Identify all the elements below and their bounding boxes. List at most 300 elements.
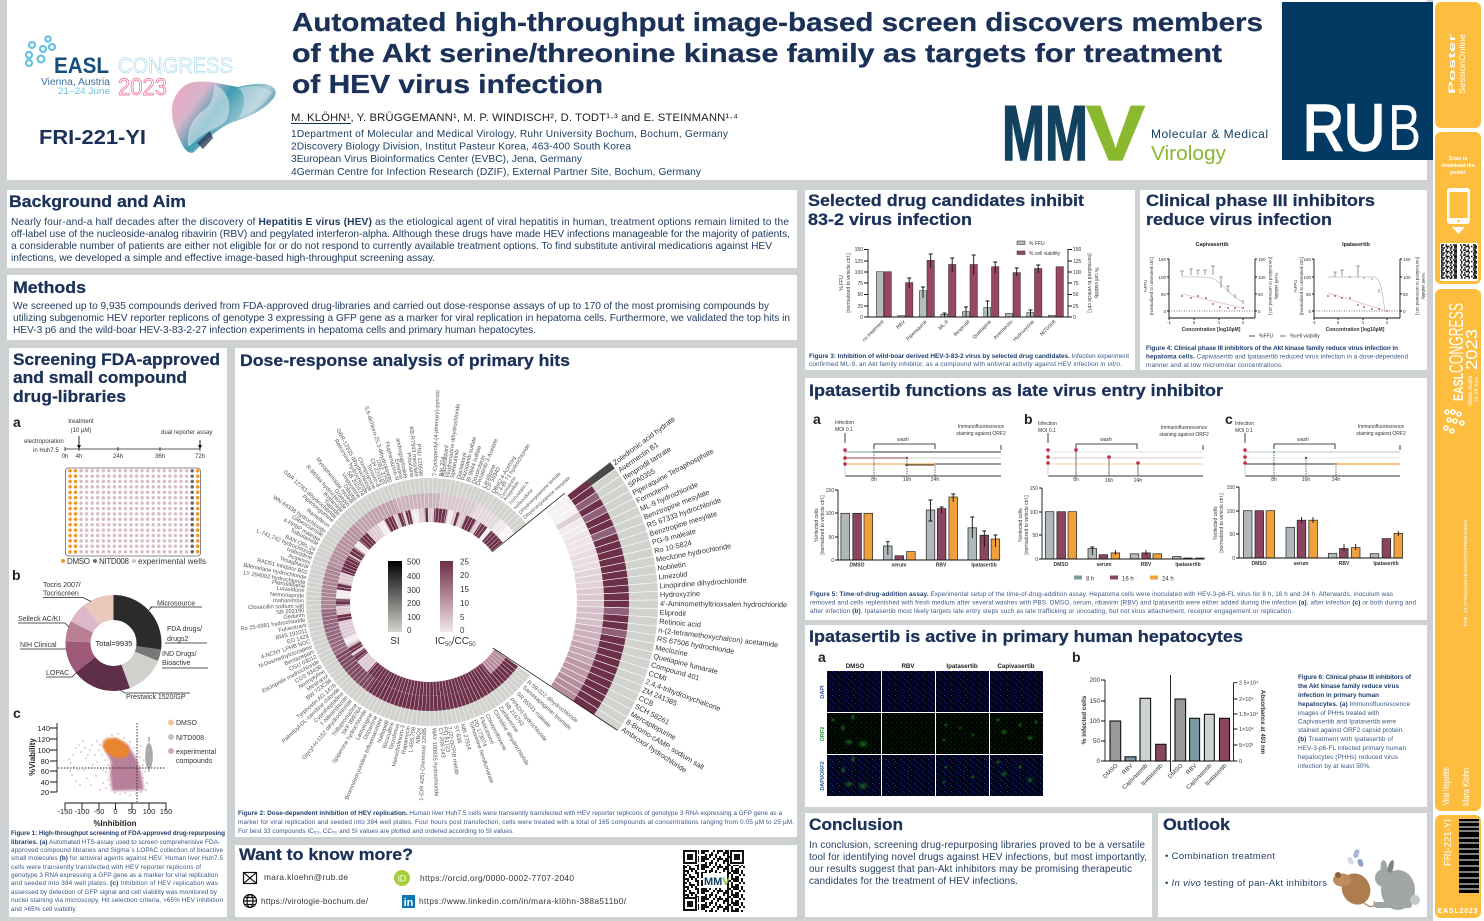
icon: linkedin <box>402 895 415 909</box>
compound labels right: Ambroxol hydrochloride <box>620 725 688 775</box>
compound labels right: 2,4,4-trihydroxychalcone <box>644 677 722 713</box>
compound labels left: Piperlongumine <box>301 494 335 524</box>
compound labels left: Dopamine <box>363 715 379 741</box>
compound labels right: CCB <box>637 694 655 708</box>
bar chart: 125 <box>1073 259 1082 265</box>
compound labels top and bottom right: Daclatasvir <box>456 451 469 480</box>
panel letters: a <box>813 411 821 427</box>
compound labels left: mahanimbin <box>273 598 304 604</box>
bar chart c: 150 <box>1227 485 1235 491</box>
compound labels left: Nortriptyline <box>298 669 327 691</box>
QR code <box>683 850 745 912</box>
compound labels left: Glibenclamide <box>290 514 324 539</box>
compound labels top and bottom right: PD 173074 <box>471 719 487 748</box>
scatter plot: 100 <box>143 807 155 816</box>
chart: Capivasertib: %FFU <box>1143 280 1148 292</box>
logo: EASL Congress 2023 <box>26 36 233 101</box>
figure 2 caption: For best 33 compounds IC₅₀, CC₅₀ and SI values are plotted and ordered according to SI values. <box>238 828 514 835</box>
compound labels left: Prilocaine <box>405 452 414 478</box>
timeline: dual reporter assay <box>161 430 212 436</box>
affiliations: 3European Virus Bioinformatics Center (EVBC), Jena, Germany <box>291 154 583 165</box>
heading: 83-2 virus infection <box>808 211 972 229</box>
schematic b: 24h <box>1134 478 1142 484</box>
heading: Ipatasertib is active in primary human hepatocytes <box>809 628 1243 646</box>
compound labels top and bottom right: Sarsasapogenin bromide <box>521 685 572 732</box>
compound labels top and bottom right: Tomoxetine hemifumarate <box>467 720 494 784</box>
figure 6 caption: images of PHHs treated with <box>1298 710 1379 717</box>
bar chart b: Ipatasertib <box>1204 763 1229 787</box>
logo: MMV <box>1002 89 1268 177</box>
schematic b <box>1038 421 1209 484</box>
text block: Nearly four-and-a half decades after the discovery of Hepatitis E virus (HEV) as the etiological agent of viral hepatitis in human, treatment options remain limited to the <box>11 217 789 228</box>
bar chart a: %infected cells <box>814 508 820 542</box>
panel letters <box>813 411 1233 427</box>
heading: Want to know more? <box>239 846 413 864</box>
right sector rings (top 33) <box>546 462 658 732</box>
bar chart b: 0 <box>1239 759 1242 765</box>
figure 1 caption: and >65% cell viability. <box>11 906 77 913</box>
figure 6 caption: HEV-3-p6-FL infected primary human <box>1298 745 1406 752</box>
compound labels left: Vinpocetine <box>340 472 361 500</box>
compound labels top and bottom right: ST-638 <box>452 725 462 744</box>
bar chart: % cell viability <box>1093 267 1099 299</box>
bar chart a: 150 <box>826 488 834 494</box>
compound labels top and bottom right: Anagrelide <box>502 480 521 502</box>
compound labels left: NBQX <box>416 727 423 744</box>
scatter plot: DMSO <box>176 720 198 727</box>
schematic c: MOI 0.1 <box>1235 428 1253 434</box>
bar chart b: 100 <box>1089 718 1100 725</box>
timeline: treatment <box>68 419 94 425</box>
icon: orcid <box>394 870 410 886</box>
bar chart b: 100 <box>1030 510 1038 516</box>
legend: IC50/CC50 colour bar: 50 <box>445 642 452 648</box>
chart: Ipatasertib: %FFU <box>1293 280 1298 292</box>
scatter plot: 100 <box>37 746 50 755</box>
chart: Capivasertib: Concentration [log10µM] <box>1182 327 1241 333</box>
logo: MMV: MM <box>1002 89 1088 177</box>
bar chart: Hydroxyzine <box>1012 319 1036 343</box>
title <box>292 7 1263 99</box>
compound labels left: Triflupromazine <box>331 703 359 738</box>
chart: Ipatasertib: 150 <box>1303 257 1311 262</box>
compound labels right: Ro 10-5824 <box>653 538 692 555</box>
time legend <box>1074 576 1174 582</box>
figure 1 caption: cells were transiently transfected with HEV reporter replicons of <box>11 864 201 871</box>
chart: Ipatasertib: -1 <box>1312 320 1316 325</box>
chart legend: %FFU <box>1259 334 1274 340</box>
bar chart: Piperaquine <box>905 319 929 342</box>
schematic c: Infection <box>1235 421 1254 427</box>
figure 3 caption: Figure 3: Inhibition of wild-boar derived HEV-3-83-2 virus by selected drug candidates. Infection experiment <box>809 353 1129 360</box>
schematic a: Infection <box>835 420 854 426</box>
microscopy image grid: DMSO <box>846 663 864 670</box>
chart: Capivasertib: %cell viability <box>1274 273 1279 300</box>
website: https://virologie-bochum.de/ <box>261 896 369 906</box>
title: of the Akt serine/threonine kinase family as targets for treatment <box>292 38 1222 68</box>
timeline: 4h <box>76 454 82 460</box>
scatter plot: %Inhibition <box>93 819 137 828</box>
compound labels right: Zoledronic acid hydrate <box>611 414 677 467</box>
compound labels right: Nobiletin <box>657 560 686 573</box>
legend: SI colour bar: 500 <box>407 558 421 566</box>
letter b: b <box>1072 649 1081 665</box>
donut chart: drugs2 <box>167 636 189 643</box>
microscopy image grid: Capivasertib <box>997 663 1035 670</box>
compound labels left: Lamotrigine <box>355 712 374 741</box>
compound labels right: SCH 58261 <box>633 702 671 727</box>
legend: SI colour bar: 100 <box>407 613 421 622</box>
compound labels top and bottom right: Chlorprothixene <box>484 713 507 752</box>
compound labels left: Nemonapride <box>270 592 304 600</box>
bar chart b: 1×10⁴ <box>1239 726 1254 733</box>
compound labels right: Mercaptopurine <box>629 709 678 742</box>
compound labels top and bottom right: Lacidipine <box>481 464 498 489</box>
compound labels left: R-96544 hydrochloride <box>304 464 347 511</box>
text block: In conclusion, screening drug-repurposing libraries proved to be a versatile <box>809 840 1146 851</box>
bar chart <box>839 241 1099 343</box>
bar chart b: DMSO <box>1102 763 1120 780</box>
schematic c <box>1235 421 1406 483</box>
figure 2 caption: Figure 2: Dose-dependent inhibition of HEV replication. Human liver Huh7.5 cells were transiently transfected with HEV reporter replicons of genotype 3 RNA expressing a GFP gene as a <box>238 810 782 817</box>
heading: Conclusion <box>809 816 903 834</box>
chart: Capivasertib: 1 <box>1218 320 1221 325</box>
scatter plot: -150 <box>57 807 73 816</box>
donut chart: IND Drugs/ <box>162 651 197 658</box>
compound labels right: ZM 241385 <box>641 685 679 708</box>
compound labels left: Glycyl-H-1152 dihydrochloride <box>301 699 354 761</box>
chart: Ipatasertib: %cell viability <box>1421 273 1426 300</box>
chart: Ipatasertib: 100 <box>1303 275 1311 280</box>
compound labels left: Rapamycin <box>401 726 412 755</box>
compound labels top and bottom right: Trichostatin A <box>508 480 531 507</box>
bar chart b: %infected cells <box>1018 508 1024 542</box>
schematic a: 16h <box>903 477 911 483</box>
compound labels right: RS 67506 hydrochloride <box>656 634 735 656</box>
panel: want to know more <box>235 845 797 917</box>
figure 5 caption: removed and cells replenished with fresh medium after several washes with PBS. DMSO, serum, ribavirin (RBV) and Ipatasertib were either added during the infection (a), after infection (c) or both during and <box>810 600 1416 606</box>
compound labels right: 4'-Aminomethyltrioxsalen hydrochloride <box>660 599 787 609</box>
bar chart: % cell viability <box>1029 251 1061 257</box>
logo: EASL Congress 2023: CONGRESS <box>118 53 233 78</box>
compound labels left: Tolbutamide <box>289 528 319 547</box>
bar chart b: 5×10³ <box>1239 743 1253 749</box>
scatter plot: NITD008 <box>176 735 204 742</box>
title: of HEV virus infection <box>292 69 603 99</box>
illustration: pills <box>1346 849 1364 867</box>
legend: SI colour bar: 300 <box>407 586 421 595</box>
affiliations: 4German Centre for Infection Research (DZIF), External Partner Site, Bochum, Germany <box>291 167 702 178</box>
schematic a: 24h <box>931 477 939 483</box>
compound labels right: Benztropine mesylate <box>648 509 718 538</box>
bar chart b: Ipatasertib <box>1140 763 1165 787</box>
illustration: mouse <box>1333 869 1375 909</box>
compound labels left: BMS 191011 <box>275 628 308 642</box>
timeline: 36h <box>155 454 165 460</box>
chart: Capivasertib: 0 <box>1163 309 1166 314</box>
figure 1 caption: genotype 3 RNA expressing a GFP gene as a marker for viral replication <box>11 872 218 879</box>
compound labels right <box>611 414 787 775</box>
compound labels left: SB 202190 <box>276 608 305 616</box>
logo: MMV: V <box>1086 89 1145 177</box>
figure 1 caption <box>11 830 225 913</box>
bar chart b: [normalized to vehicle ctrl.] <box>1024 495 1030 555</box>
compound labels left: OSU 03012 <box>289 654 318 673</box>
chart: Capivasertib <box>1143 242 1279 333</box>
logo: EASL Congress 2023: 21–24 June <box>58 86 110 97</box>
donut chart: Microsource <box>157 600 195 608</box>
legend: SI colour bar: 400 <box>407 572 421 581</box>
384 well plate <box>66 468 200 556</box>
donut chart: Bioactive <box>162 660 191 667</box>
chart: Capivasertib: 150 <box>1258 257 1266 262</box>
timeline: electroporation <box>24 439 64 445</box>
schematic a <box>835 420 1006 483</box>
bar chart c: 100 <box>1227 509 1235 515</box>
bar chart c: 0 <box>1232 556 1235 562</box>
panel label a: a <box>13 414 21 430</box>
bar chart b: RBV <box>1141 562 1152 568</box>
time legend: 8 h <box>1086 576 1094 582</box>
chart: Capivasertib: [normalized to untreated ctrl.] <box>1268 257 1273 315</box>
compound labels left: Tesaglitazar <box>279 556 310 571</box>
heading: Outlook <box>1163 816 1231 834</box>
timeline: 0h <box>62 454 68 460</box>
figure 4 caption: hepatoma cells. Capivasertib and Ipatasertib reduced virus infection in a dose-dependend <box>1146 354 1408 360</box>
legend: IC50/CC50 colour bar: /CC <box>452 636 469 647</box>
figure 1 caption: small molecules (b) for antiviral agents against HEV. Human liver Huh7.5 <box>11 855 223 862</box>
compound labels top and bottom right: SR 95531 maleate <box>515 691 552 729</box>
bar chart b: DMSO <box>1054 562 1069 568</box>
logo: EASL Congress 2023: EASL <box>54 53 109 78</box>
donut chart: Prestwick 1520/GP <box>126 694 186 701</box>
bar chart: 0 <box>860 315 863 321</box>
figure 1 caption: assessed by detection of GFP signal and cell viability was monitored by <box>11 889 218 896</box>
compound labels top and bottom right: BI 8844 sulfate <box>466 445 483 483</box>
compound labels left: Fluphenazine-N <box>383 441 399 481</box>
compound labels left: BW 723C86 <box>305 678 333 702</box>
schematic a: wash <box>897 437 909 443</box>
circular heatmap <box>240 390 787 800</box>
figure 1 caption: and seeded into 384 well plates. (c) Inhibition of HEV replication was <box>11 880 218 887</box>
compound labels right: Ifenprodil tartrate <box>621 445 673 482</box>
bar chart: 25 <box>857 304 863 310</box>
sidebar: congress: 21–24 June <box>1474 377 1480 402</box>
compound labels left: Pterostilbene <box>272 580 305 590</box>
compound labels right: ML-9 hydrochloride <box>639 480 699 513</box>
text block: a considerable number of patients are either not eligible for or do not respond to currently available treatment options. To find substitute antiviral medications against HEV <box>11 241 772 252</box>
sector cut lines <box>492 493 617 730</box>
bar chart b: 150 <box>1089 698 1100 705</box>
title: Automated high-throughput image-based screen discovers members <box>292 7 1263 37</box>
compound labels left: Cyproheptadine <box>313 691 345 724</box>
panel: background and aim <box>7 190 797 268</box>
compound labels left: Clomipramine <box>356 456 377 491</box>
compound labels right: Avermectin B1 <box>616 440 660 474</box>
bar chart a <box>814 488 1000 568</box>
sidebar: barcode <box>1435 815 1481 918</box>
legend: IC50/CC50 colour bar: 5 <box>460 613 465 622</box>
icon: envelope <box>244 872 256 884</box>
compound labels left: Spiperone hydrochloride <box>332 709 369 765</box>
compound labels left: Ro 25-6981 hydrochloride <box>240 618 306 633</box>
compound labels top and bottom right: Spebrutinib <box>450 449 461 479</box>
chart: Ipatasertib: [normalized to untreated ctrl.] <box>1415 257 1420 315</box>
compound labels left: 5,6-dichloro-25,3-dihydrokinetin <box>363 406 393 483</box>
compound labels top and bottom right: Pazopanib sulfate <box>461 436 478 481</box>
bar chart: % FFU <box>1029 241 1045 247</box>
bar chart: 150 <box>1073 247 1082 253</box>
figure 1 caption: libraries. (a) Automated HTS-assay used to screen comprehensive FDA- <box>11 839 220 846</box>
compound labels left: DBZ 3755 <box>374 459 389 485</box>
bar chart c: DMSO <box>1252 561 1267 567</box>
bar chart c: Ipatasertib <box>1373 561 1399 567</box>
chart: Capivasertib: 50 <box>1161 292 1166 297</box>
schematic b: 16h <box>1105 478 1113 484</box>
schematic a: staining against ORF2 <box>956 431 1006 437</box>
bar chart: 50 <box>1073 292 1079 298</box>
compound labels top and bottom right <box>430 390 579 797</box>
bar chart: no treatment <box>861 319 886 343</box>
legend: IC50/CC50 colour bar: 10 <box>460 599 469 608</box>
bar chart b: 50 <box>1032 533 1038 539</box>
text block: infections, we developed a simple and effective image-based high-throughput screening assay. <box>11 253 435 264</box>
bar chart b: RBV <box>1121 763 1134 776</box>
compound labels left: Tacrolimus <box>388 723 401 751</box>
bar chart: 75 <box>857 281 863 287</box>
compound labels top and bottom right: CP 55940 <box>485 466 502 492</box>
bar chart: 100 <box>855 270 863 276</box>
compound labels left: EO 1428 <box>286 634 310 646</box>
logo: MMV: Virology <box>1151 143 1226 165</box>
affiliations: 2Discovery Biology Division, Institut Pasteur Korea, 463-400 South Korea <box>291 142 631 152</box>
figure 3 caption <box>809 353 1129 368</box>
sidebar: barcode: FRI-221-YI <box>1443 819 1454 866</box>
bar chart: 50 <box>857 292 863 298</box>
compound labels left: Mestranol <box>306 674 330 693</box>
donut chart: Selleck AC/KI <box>18 616 60 623</box>
compound labels top and bottom right: R 59-022 dihydrochloride <box>525 680 579 724</box>
bar chart: [normalized to vehicle ctrl.] <box>846 253 852 313</box>
compound labels top and bottom right: Dasatinib-3-Acetate <box>475 438 500 487</box>
figure 5 caption <box>810 591 1416 615</box>
legend: IC50/CC50 colour bar: 20 <box>460 571 469 580</box>
figure 4 caption: manner and at low micromolar concentrations. <box>1146 362 1283 369</box>
affiliations <box>291 129 729 178</box>
panel letters: b <box>1024 411 1033 427</box>
schematic b: 8h <box>1073 477 1079 483</box>
schematic c: Immunofluorescence <box>1358 424 1404 430</box>
plate legend <box>61 557 206 566</box>
chart: Capivasertib: 2 <box>1242 320 1245 325</box>
compound labels right: Compound 401 <box>650 660 701 683</box>
bar chart a: serum <box>891 562 907 568</box>
heading <box>1146 192 1375 229</box>
bar chart b: 2×10⁴ <box>1239 696 1254 703</box>
logo: MMV: Molecular & Medical <box>1151 127 1268 141</box>
compound labels left: Palmitoyl-DL-carnitine chloride <box>281 687 341 745</box>
chart: Ipatasertib: 50 <box>1306 292 1311 297</box>
microscopy image grid: DAPI <box>820 685 826 699</box>
bar chart c: %infected cells <box>1213 506 1219 540</box>
right strip background <box>1433 0 1484 921</box>
legend: IC50/CC50 colour bar: 50 <box>469 642 476 648</box>
donut chart: Tocriscreen <box>43 590 79 598</box>
bar chart: Avermectin <box>993 319 1015 341</box>
figure 6 caption: (b) Treatment with Ipatasertib of <box>1298 736 1393 743</box>
compound labels right: n-(2-tetramethoxychalcon) acetamide <box>658 625 779 649</box>
microscopy image grid: RBV <box>901 663 915 670</box>
compound labels top and bottom right: Fluticasone <box>478 716 495 745</box>
icon: liver <box>172 81 276 153</box>
sidebar: poster session: Poster <box>1447 33 1457 94</box>
compound labels left: 4-NCNY LPHB NOC <box>260 639 311 661</box>
text block: our results suggest that pan-Akt inhibitors may be promising therapeutic <box>809 864 1132 875</box>
bar chart c <box>1213 485 1403 567</box>
figure 2 caption: marker for viral replication and seeded into 384 well plates. Four hours post transfection, cells were treated with a total of 165 compounds at concentrations ranging from 0.05 µM to 25 µM. <box>238 819 794 826</box>
sidebar: congress: 2023 <box>1464 329 1481 370</box>
compound labels left: Lurasidone <box>276 586 305 594</box>
bar chart b: Absorbance at 493 nm <box>1259 690 1265 754</box>
panel label c: c <box>13 705 21 721</box>
illustration: rabbit <box>1374 860 1420 910</box>
bar chart b: Ipatasertib <box>1175 562 1201 568</box>
figure 4 caption: Figure 4: Clinical phase III inhibitors of the Akt kinase family reduce virus infection in <box>1146 345 1398 352</box>
microscopy image grid: Ipatasertib <box>946 663 978 670</box>
compound labels right: Formoterol <box>635 481 671 505</box>
compound labels top and bottom right: SB 216763 <box>503 701 524 728</box>
compound labels left: KB-R7943 mesylate <box>408 426 419 477</box>
schematic c: 16h <box>1302 477 1310 483</box>
bar chart b: 0 <box>1035 557 1038 563</box>
compound labels left: Doxepin <box>333 488 351 508</box>
bar chart b: RBV <box>1185 763 1198 776</box>
timeline: 72h <box>195 454 205 460</box>
compound labels top and bottom right: 7-(2)-DCPIB metab <box>446 726 459 775</box>
legend: IC50/CC50 colour bar: IC <box>435 636 445 647</box>
text block <box>13 301 790 336</box>
compound labels right: Meclozine <box>655 643 689 658</box>
compound labels left: Bicuculline <box>382 722 396 749</box>
schematic c: staining against ORF2 <box>1356 431 1406 437</box>
chart: Capivasertib: Capivasertib <box>1195 242 1229 248</box>
compound labels left <box>240 406 428 801</box>
bar chart: 150 <box>855 247 863 253</box>
timeline <box>24 419 212 460</box>
chart: Capivasertib: -1 <box>1167 320 1171 325</box>
microscopy image grid: DAPI/ORF2 <box>820 761 826 791</box>
chart legend <box>1249 334 1320 340</box>
text block: tool for identifying novel drugs against HEV infections, but most importantly, <box>809 852 1147 863</box>
compound labels left: SB 202474 <box>345 470 365 497</box>
panel: dose-response <box>235 348 797 837</box>
logo: EASL Congress 2023: 2023 <box>118 74 167 101</box>
compound labels right: Quetiapine fumarate <box>653 652 719 676</box>
figure 1 caption: Figure 1: High-throughput screening of FDA-approved drug-repurposing <box>11 830 225 837</box>
compound labels left: N-Desmethylclozapine <box>258 644 313 670</box>
chart: Ipatasertib: 0 <box>1308 309 1311 314</box>
schematic b: Immunofluorescence <box>1161 425 1207 431</box>
compound labels left: Ramelteon <box>305 508 331 529</box>
chart: Ipatasertib: 150 <box>1403 257 1411 262</box>
compound labels top and bottom right: Nefazodone <box>513 488 535 511</box>
text block <box>809 840 1147 887</box>
sidebar: congress <box>1435 289 1481 811</box>
bullet list: • In vivo testing of pan-Akt inhibitors <box>1165 878 1327 889</box>
compound labels left: Eticlopride methochloride <box>261 659 321 695</box>
text block: off-label use of the nucleoside-analog ribavirin (RBV) and pegylated interferon-alpha. Although these drugs have made HEV infections manageable for the majority of patients, <box>11 229 790 240</box>
heading: Methods <box>13 279 86 297</box>
